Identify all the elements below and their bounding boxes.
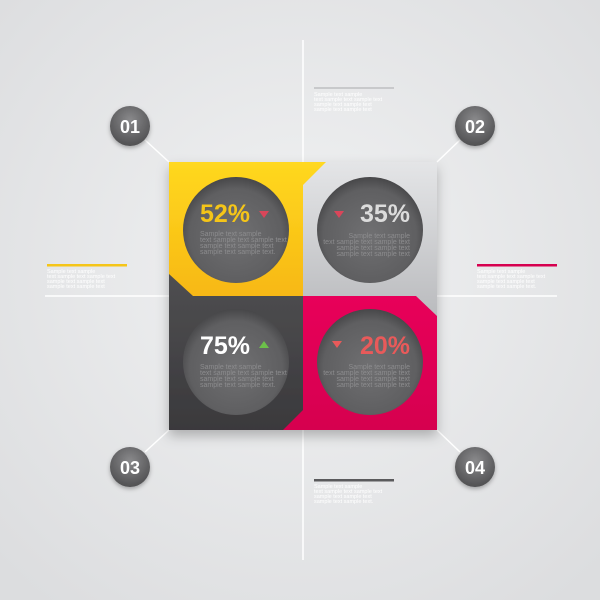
circle 20% <box>317 309 423 415</box>
badge 01 <box>110 106 150 146</box>
badge 03: 03 <box>120 458 140 478</box>
circle 75% <box>183 309 289 415</box>
text block: bottom: Sample text sample <box>314 484 362 490</box>
circle 35% <box>317 177 423 283</box>
text block: bottom: sample text sample text. <box>314 499 374 505</box>
text block: left <box>47 264 127 290</box>
circle 52%: Sample text sample <box>200 231 262 238</box>
circle 52%: sample text sample text. <box>200 249 276 256</box>
circle 52%: sample text sample text <box>200 243 274 250</box>
text block: top: sample text sample text <box>314 102 372 108</box>
text block: bottom: sample text sample text <box>314 494 372 500</box>
badge 04: 04 <box>465 458 485 478</box>
text block: right <box>477 264 557 290</box>
circle 75%: Sample text sample <box>200 364 262 371</box>
text block: top: sample text sample text <box>314 107 372 113</box>
circle 20%: sample text sample text <box>336 376 410 383</box>
circle 75%: sample text sample text <box>200 376 274 383</box>
circle 52%: text sample text sample text <box>200 237 287 244</box>
circle 35%: 35% <box>360 200 410 228</box>
text block: right: Sample text sample <box>477 269 525 275</box>
quadrant: pink <box>283 296 437 430</box>
main square <box>169 162 437 430</box>
circle 52% <box>183 177 289 283</box>
badge 03 <box>110 447 150 487</box>
text block: bottom <box>314 479 394 505</box>
badge 02 <box>455 106 495 146</box>
circle 20%: Sample text sample <box>349 364 410 371</box>
text block: top: Sample text sample <box>314 92 362 98</box>
circle 20%: 20% <box>360 332 410 360</box>
circle 52%: 52% <box>200 200 250 228</box>
badge 01: 01 <box>120 117 140 137</box>
text block: left: sample text sample text <box>47 284 105 290</box>
axis lines <box>45 40 557 560</box>
circle 35%: Sample text sample <box>349 233 410 240</box>
circle 35%: sample text sample text <box>336 245 410 252</box>
circle 75%: text sample text sample text <box>200 370 287 377</box>
text block: top <box>314 87 394 113</box>
text block: left: text sample text sample text <box>47 274 116 280</box>
circle 75%: sample text sample text. <box>200 382 276 389</box>
text block: right: text sample text sample text <box>477 274 546 280</box>
circle 35%: sample text sample text <box>336 251 410 258</box>
text block: left: sample text sample text <box>47 279 105 285</box>
badge 02: 02 <box>465 117 485 137</box>
circle 35%: text sample text sample text <box>323 239 410 246</box>
text block: top: text sample text sample text <box>314 97 383 103</box>
text block: left: Sample text sample <box>47 269 95 275</box>
text block: bottom: text sample text sample text <box>314 489 383 495</box>
circle 20%: text sample text sample text <box>323 370 410 377</box>
circle 75%: 75% <box>200 332 250 360</box>
badge 04 <box>455 447 495 487</box>
text block: right: sample text sample text <box>477 279 535 285</box>
text block: right: sample text sample text. <box>477 284 537 290</box>
quadrant: yellow <box>169 162 326 296</box>
circle 20%: sample text sample text <box>336 382 410 389</box>
quadrant: top-right light <box>303 162 437 320</box>
